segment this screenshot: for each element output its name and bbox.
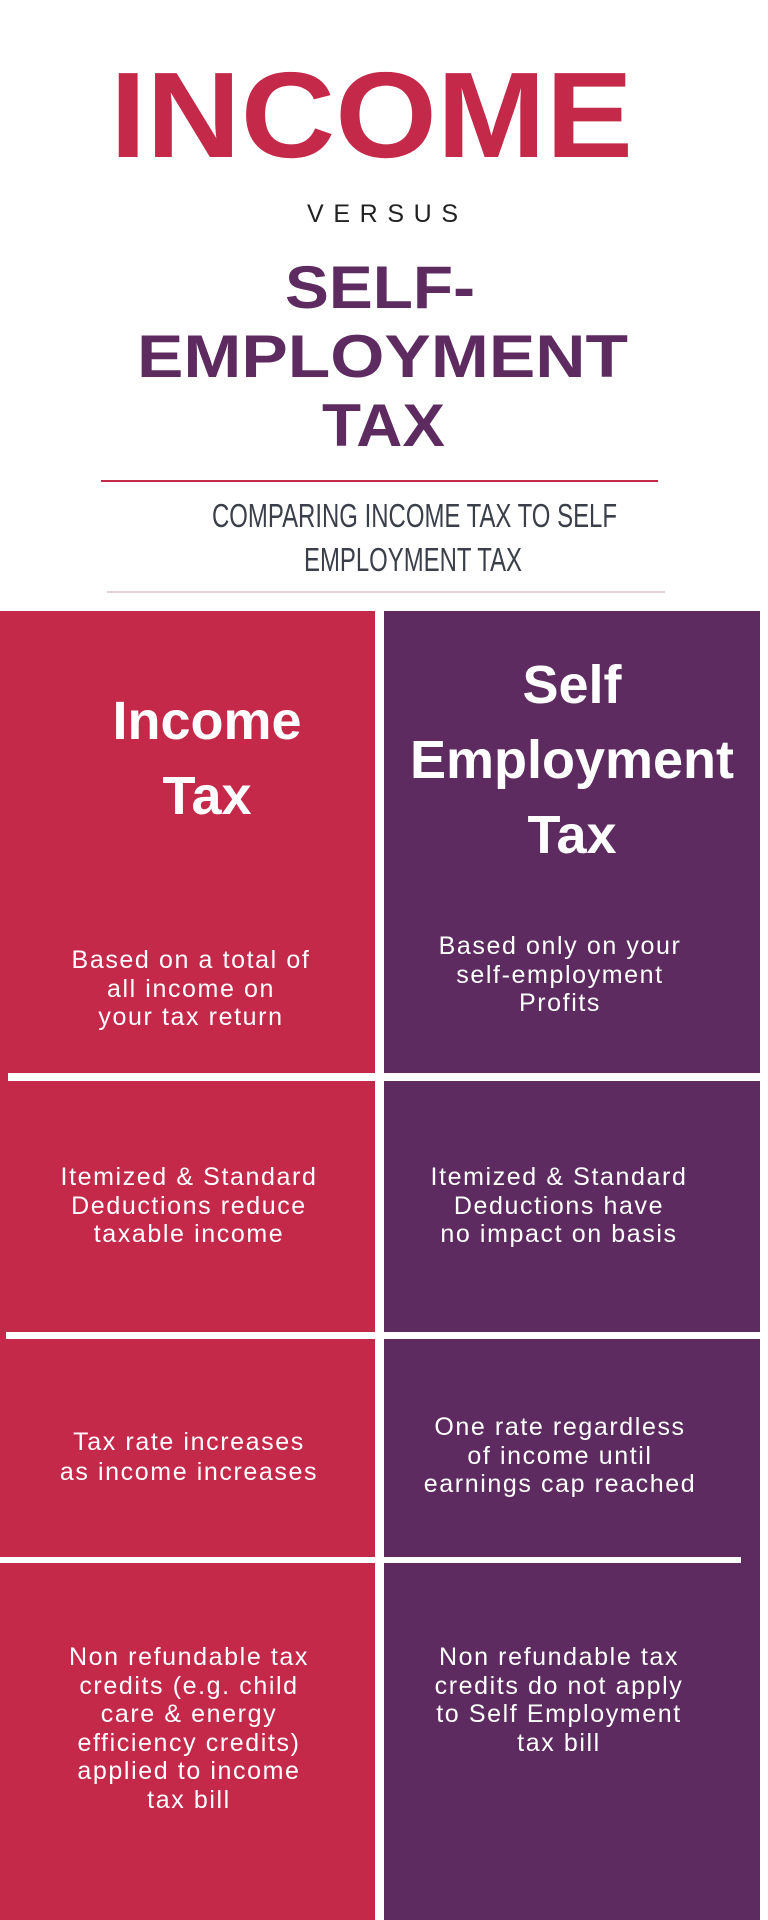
text: self row 4: tax bill bbox=[517, 1729, 601, 1757]
heading: Self Employment Tax: Tax bbox=[527, 805, 617, 865]
text: self row 2: Deductions have bbox=[454, 1192, 664, 1220]
text: self row 3: earnings cap reached bbox=[424, 1470, 696, 1498]
text: income row 1: all income on bbox=[107, 975, 275, 1003]
text: self row 2: no impact on basis bbox=[440, 1220, 678, 1248]
subtitle: EMPLOYMENT TAX bbox=[304, 541, 522, 578]
panel: self employment tax column bbox=[384, 611, 760, 1920]
subtitle: COMPARING INCOME TAX TO SELF bbox=[212, 497, 617, 534]
text: self row 1: Profits bbox=[519, 989, 601, 1017]
heading: Self Employment Tax: Employment bbox=[410, 730, 734, 790]
versus label: VERSUS bbox=[307, 200, 458, 228]
text: self row 3: One rate regardless bbox=[434, 1413, 686, 1441]
title: self-employment tax: EMPLOYMENT bbox=[137, 323, 628, 390]
header bbox=[101, 47, 665, 593]
heading: Self Employment Tax bbox=[410, 655, 734, 865]
text: self row 3 bbox=[424, 1413, 696, 1498]
text: income row 1: your tax return bbox=[98, 1003, 284, 1031]
text: self row 4: to Self Employment bbox=[436, 1700, 682, 1728]
text: income row 2: Deductions reduce bbox=[71, 1192, 307, 1220]
text: income row 3: as income increases bbox=[60, 1458, 318, 1486]
text: income row 4: efficiency credits) bbox=[77, 1729, 301, 1757]
text: income row 1: Based on a total of bbox=[72, 946, 310, 974]
text: income row 4: care & energy bbox=[101, 1700, 277, 1728]
heading: Income Tax: Income bbox=[112, 691, 302, 751]
text: income row 2: Itemized & Standard bbox=[61, 1163, 317, 1191]
text: income row 1 bbox=[72, 946, 310, 1031]
text: self row 4 bbox=[435, 1643, 683, 1757]
heading: Income Tax: Tax bbox=[162, 766, 252, 826]
text: self row 1 bbox=[439, 932, 681, 1017]
subtitle bbox=[212, 497, 617, 578]
text: self row 2 bbox=[431, 1163, 687, 1248]
text: income row 4: Non refundable tax bbox=[69, 1643, 309, 1671]
text: income row 2 bbox=[61, 1163, 317, 1248]
text: income row 4 bbox=[69, 1643, 309, 1814]
text: self row 1: self-employment bbox=[456, 961, 664, 989]
heading: Income Tax bbox=[112, 691, 302, 826]
title: self-employment tax: TAX bbox=[322, 392, 445, 459]
title: INCOME: INCOME bbox=[110, 47, 633, 183]
text: income row 3: Tax rate increases bbox=[73, 1428, 305, 1456]
heading: Self Employment Tax: Self bbox=[522, 655, 622, 715]
text: self row 2: Itemized & Standard bbox=[431, 1163, 687, 1191]
text: income row 4: applied to income bbox=[77, 1757, 301, 1785]
text: income row 4: tax bill bbox=[147, 1786, 231, 1814]
text: self row 3: of income until bbox=[467, 1442, 653, 1470]
text: income row 3 bbox=[60, 1428, 318, 1486]
text: income row 4: credits (e.g. child bbox=[79, 1672, 299, 1700]
text: self row 1: Based only on your bbox=[439, 932, 681, 960]
text: self row 4: credits do not apply bbox=[435, 1672, 683, 1700]
title: self-employment tax: SELF- bbox=[285, 254, 475, 321]
title: self-employment tax bbox=[137, 254, 628, 459]
text: self row 4: Non refundable tax bbox=[439, 1643, 679, 1671]
panel: income tax column bbox=[0, 611, 375, 1920]
text: income row 2: taxable income bbox=[94, 1220, 284, 1248]
